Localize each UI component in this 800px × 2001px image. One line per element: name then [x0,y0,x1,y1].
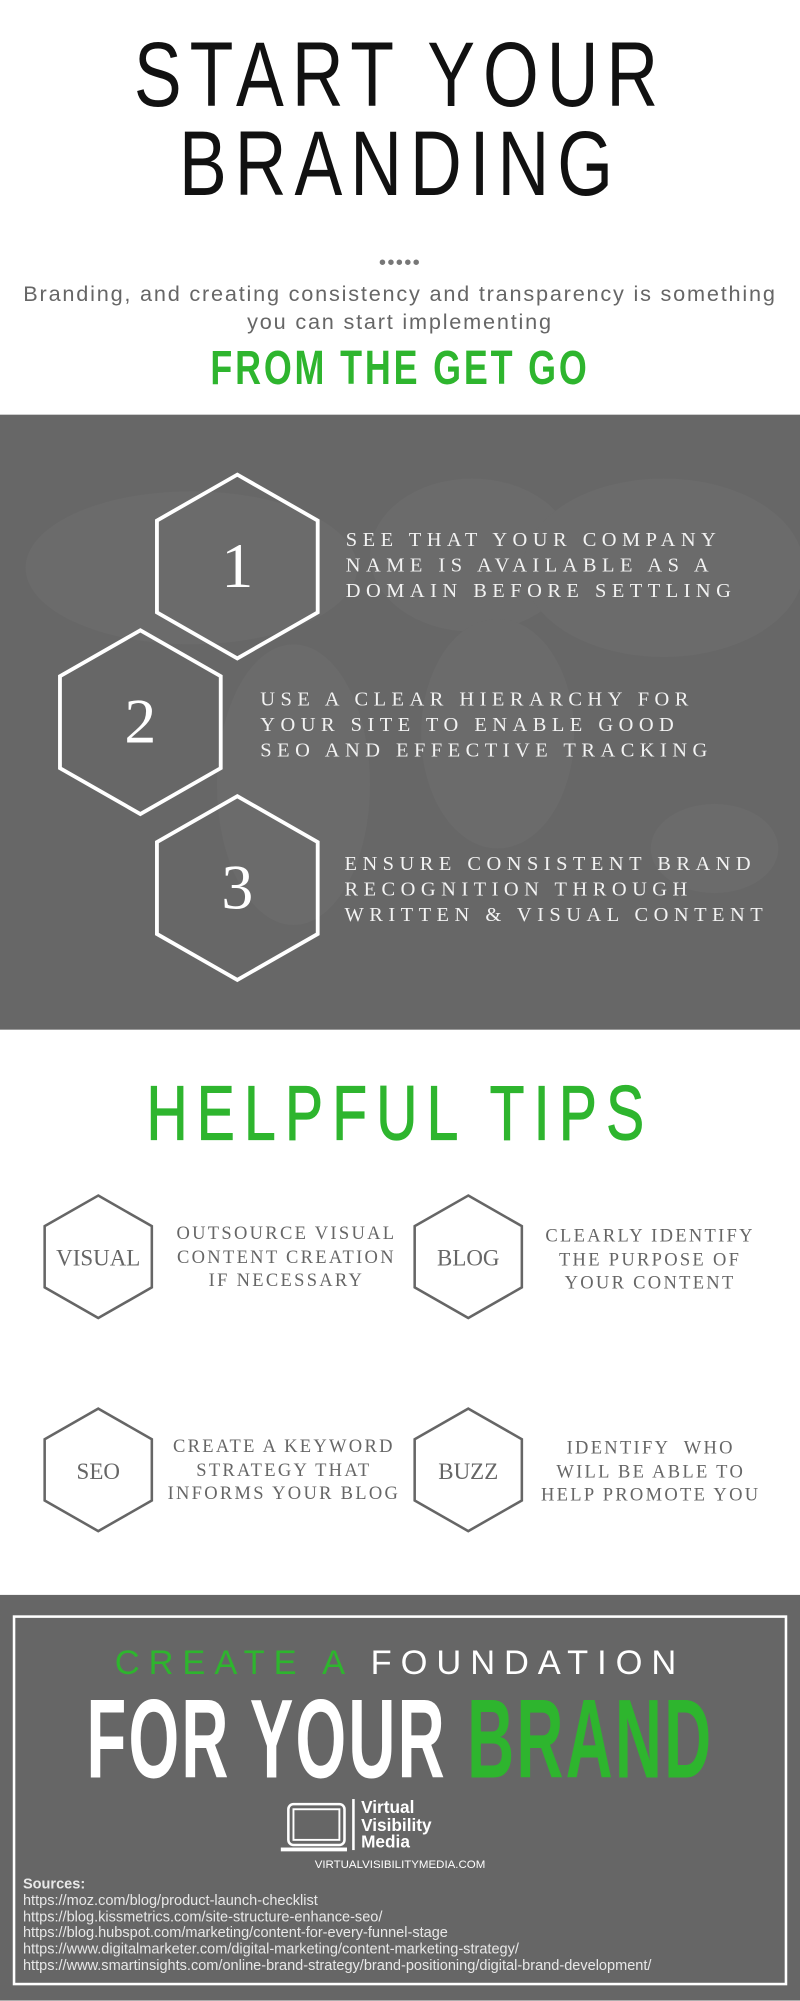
tip: visual [43,1194,396,1320]
heading: helpful tips: HELPFUL TIPS [147,1070,653,1156]
subtitle [23,282,777,334]
icon: laptop [280,1802,347,1852]
heading: create a foundation: CREATE A FOUNDATION [115,1643,685,1682]
hexagon 2: 2 [124,686,156,757]
icon: visual hexagon [43,1194,154,1320]
text: YOUR CONTENT [565,1273,736,1294]
subtitle: Branding, and creating consistency and transparency is something [23,282,777,306]
step 3 text [344,854,768,926]
subheading: from the get go: FROM THE GET GO [210,342,590,396]
logo: Virtual [361,1798,414,1817]
icon: buzz hexagon: BUZZ [438,1459,498,1484]
sources: Sources: [23,1877,85,1892]
text: STRATEGY THAT [196,1460,372,1481]
hexagon 3 [155,794,320,982]
map background [0,415,800,1030]
title: START YOUR [134,24,666,126]
step 1 text: DOMAIN BEFORE SETTLING [346,581,736,602]
step 1 text: NAME IS AVAILABLE AS A [346,555,714,577]
sources: https://blog.hubspot.com/marketing/content-for-every-funnel-stage [23,1926,448,1941]
icon: blog hexagon: BLOG [437,1246,500,1271]
text: OUTSOURCE VISUAL [176,1224,396,1244]
logo: Visibility [361,1815,432,1834]
tip: buzz [413,1407,760,1533]
step 3 text: ENSURE CONSISTENT BRAND [344,854,756,875]
sources: https://blog.kissmetrics.com/site-structure-enhance-seo/ [23,1910,382,1925]
icon: seo hexagon [43,1407,154,1533]
text: CLEARLY IDENTIFY [545,1226,755,1247]
title: BRANDING [179,114,621,216]
text [168,1437,400,1504]
step 2 text [260,689,713,762]
text: IF NECESSARY [209,1271,364,1291]
tip: seo [43,1407,400,1533]
text: CONTENT CREATION [177,1247,396,1268]
text [176,1224,396,1291]
dots: ••••• [379,253,421,274]
step 2 text: USE A CLEAR HIERARCHY FOR [260,689,694,711]
text: INFORMS YOUR BLOG [168,1484,400,1504]
icon: buzz hexagon [413,1407,524,1533]
step 3 text: WRITTEN & VISUAL CONTENT [344,905,768,926]
step 1 text [346,530,736,602]
panel: footer [0,1595,800,2001]
text: CREATE A KEYWORD [173,1437,395,1457]
text: IDENTIFY WHO [567,1438,735,1458]
step 1 text: SEE THAT YOUR COMPANY [346,530,721,551]
step 3 text: RECOGNITION THROUGH [344,879,693,901]
text: WILL BE ABLE TO [556,1462,745,1482]
panel: steps [0,415,800,1030]
step 2 text: SEO AND EFFECTIVE TRACKING [260,740,713,762]
title [134,24,666,216]
tip: blog [413,1194,755,1320]
sources [23,1877,652,1974]
step 2 text: YOUR SITE TO ENABLE GOOD [260,715,679,736]
text [541,1438,760,1506]
url: VIRTUALVISIBILITYMEDIA.COM [315,1858,485,1870]
heading: for your brand: FOR YOUR BRAND [87,1675,713,1802]
logo [280,1798,432,1852]
icon: blog hexagon [413,1194,524,1320]
sources: https://www.smartinsights.com/online-brand-strategy/brand-positioning/digital-brand-development/ [23,1959,651,1974]
hexagon 1 [155,472,320,661]
hexagon 2 [58,628,223,816]
frame [13,1615,787,1985]
text [545,1226,755,1294]
hexagon 3: 3 [221,851,253,922]
subtitle: you can start implementing [247,310,553,334]
text: HELP PROMOTE YOU [541,1485,760,1506]
logo: Media [361,1832,410,1851]
hexagon 1: 1 [221,530,253,601]
text: THE PURPOSE OF [559,1250,741,1270]
sources: https://www.digitalmarketer.com/digital-marketing/content-marketing-strategy/ [23,1942,519,1958]
sources: https://moz.com/blog/product-launch-checklist [23,1893,318,1909]
icon: seo hexagon: SEO [77,1459,120,1484]
icon: visual hexagon: VISUAL [56,1246,140,1271]
